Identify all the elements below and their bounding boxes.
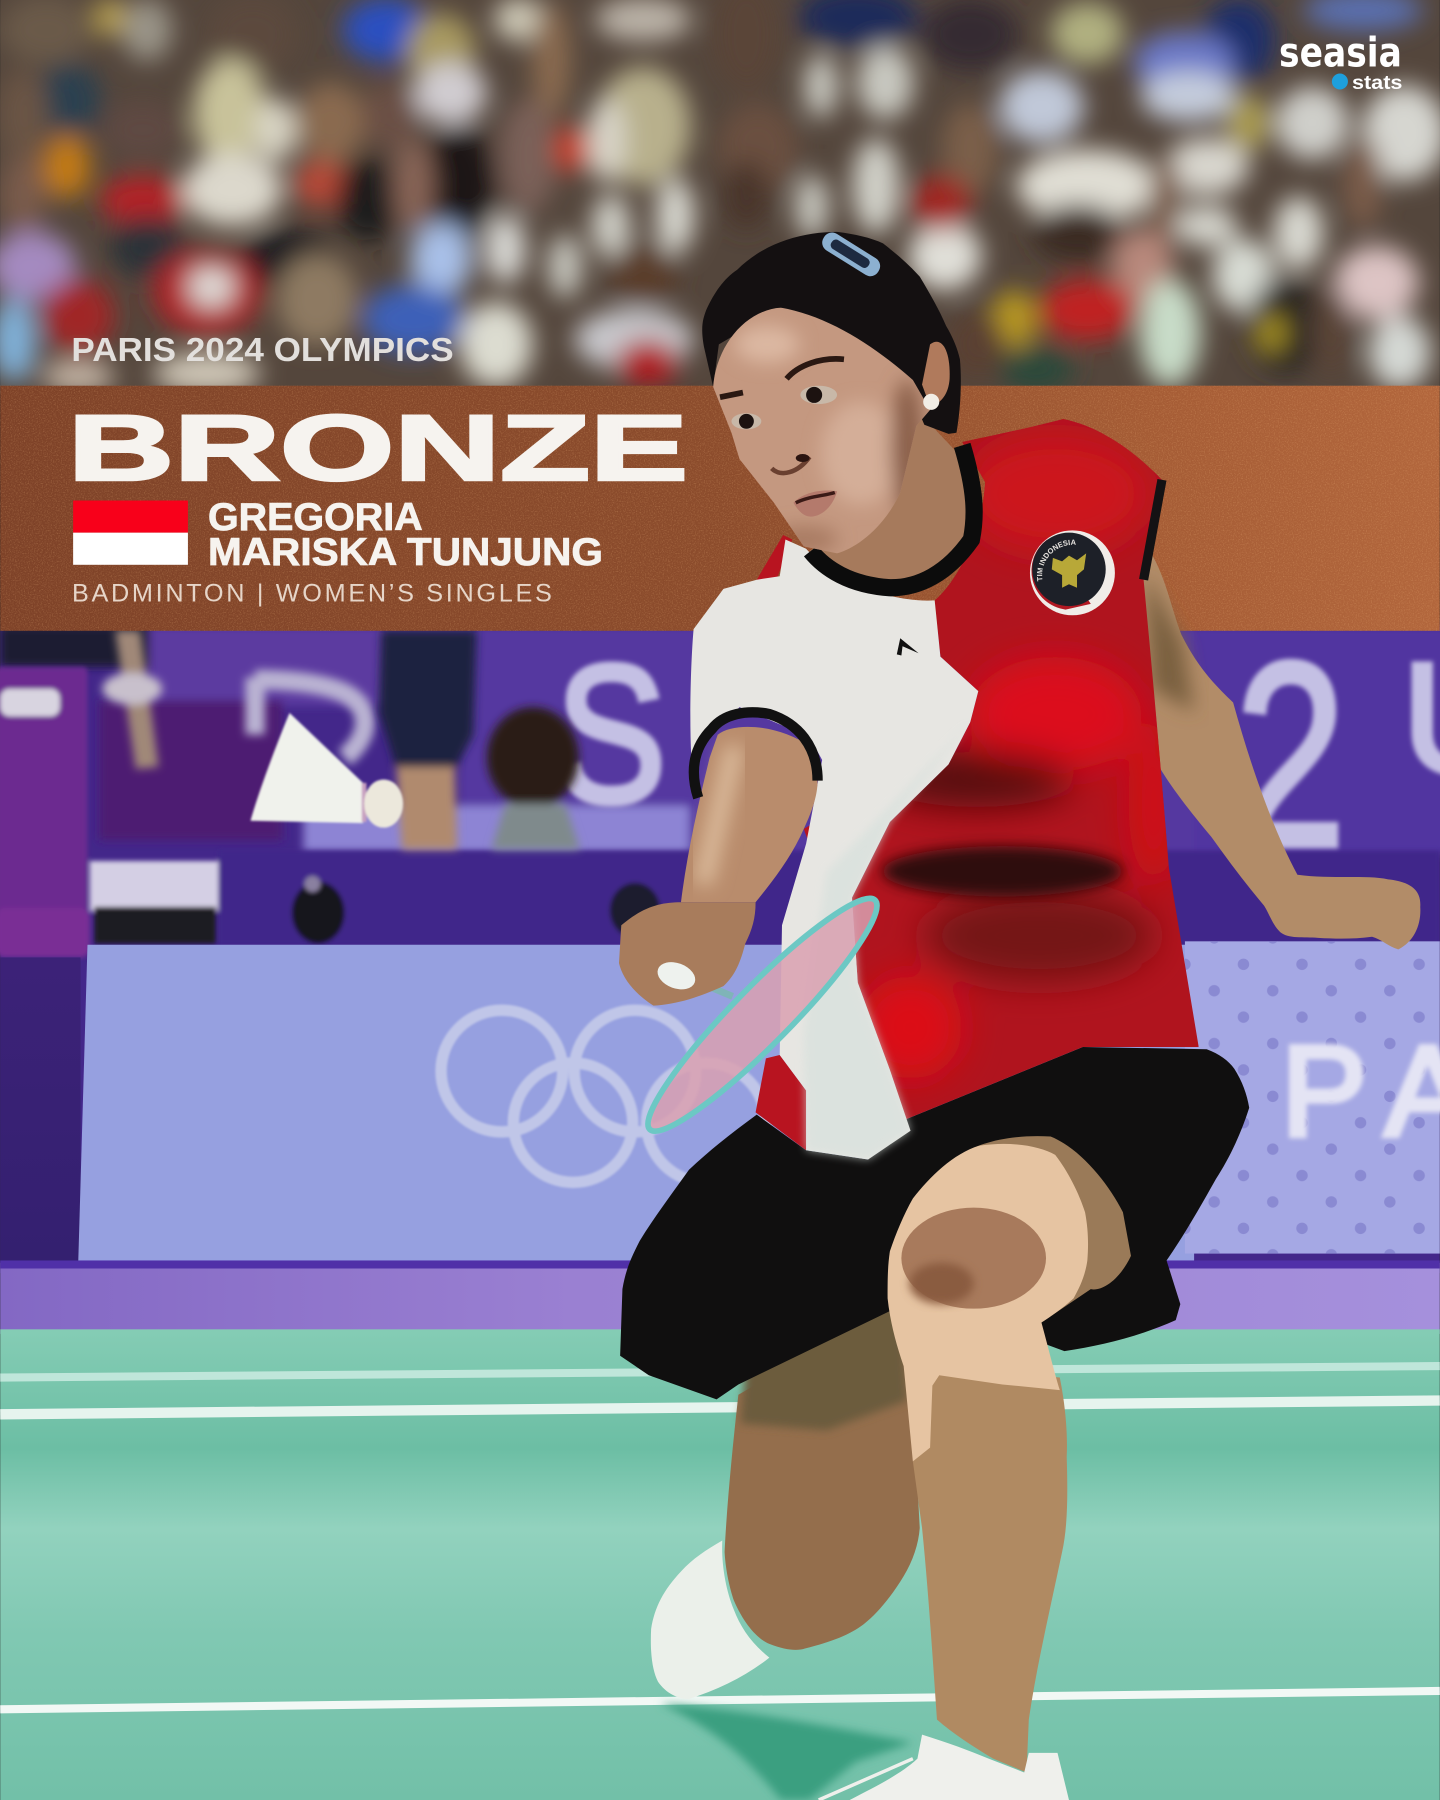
rear leg [725,1297,920,1650]
far arm [1131,549,1420,949]
jersey red trim [756,535,818,1150]
jersey white panel [690,540,978,1159]
kneecap shadow [909,1263,974,1304]
athlete [619,232,1420,1800]
hair clip [819,229,884,280]
background: blurred crowd [0,0,1440,394]
background: arena and hoardings: S [556,625,666,843]
hair [702,232,961,434]
shoe lace [819,1759,913,1800]
knee tape [888,1144,1088,1461]
collar [811,445,974,588]
court floor [0,1260,1440,1800]
far arm shadow [1146,574,1194,712]
icon: Indonesian flag [73,501,188,565]
Olympic rings [441,1010,766,1182]
armhole trim [1144,480,1162,580]
jersey red panel [852,419,1199,1119]
front shoe [850,1735,1069,1800]
logo: seasia stats [1279,29,1403,94]
bronze band [0,386,1440,631]
kneecap [901,1208,1046,1309]
rear shoe [651,1541,769,1699]
front lower leg [913,1366,1067,1772]
jersey white shading [804,722,970,1159]
emblem: TIM INDONESIA [1037,540,1076,582]
rear leg shadow [741,1297,907,1430]
ear [922,342,950,406]
heading: BRONZE: BRONZE [68,396,688,500]
background: arena and hoardings [0,609,1440,1273]
racket [629,880,896,1150]
hand [619,902,756,1006]
floor shadow [660,1704,913,1800]
shuttlecock [250,713,403,828]
racket grip [654,957,699,994]
background spectators [102,630,580,849]
athlete name: GREGORIA [208,496,423,539]
logo: seasia stats: seasia [1279,29,1402,77]
skirt [620,1047,1249,1399]
background: arena and hoardings: 2 [1235,609,1346,901]
athlete name: MARISKA TUNJUNG [208,531,603,574]
facial features [720,359,939,517]
athlete name [208,496,603,574]
emblem [1030,530,1115,616]
event label: PARIS 2024 OLYMPICS [71,332,454,369]
face [713,308,930,554]
sleeve cuff [694,712,818,798]
logo: seasia stats: stats [1352,72,1403,94]
front thigh [919,1136,1131,1322]
near arm [681,727,818,902]
brand mark [897,638,919,655]
discipline: BADMINTON | WOMEN’S SINGLES [72,580,552,608]
neck [810,413,971,581]
arm highlight [703,746,735,884]
